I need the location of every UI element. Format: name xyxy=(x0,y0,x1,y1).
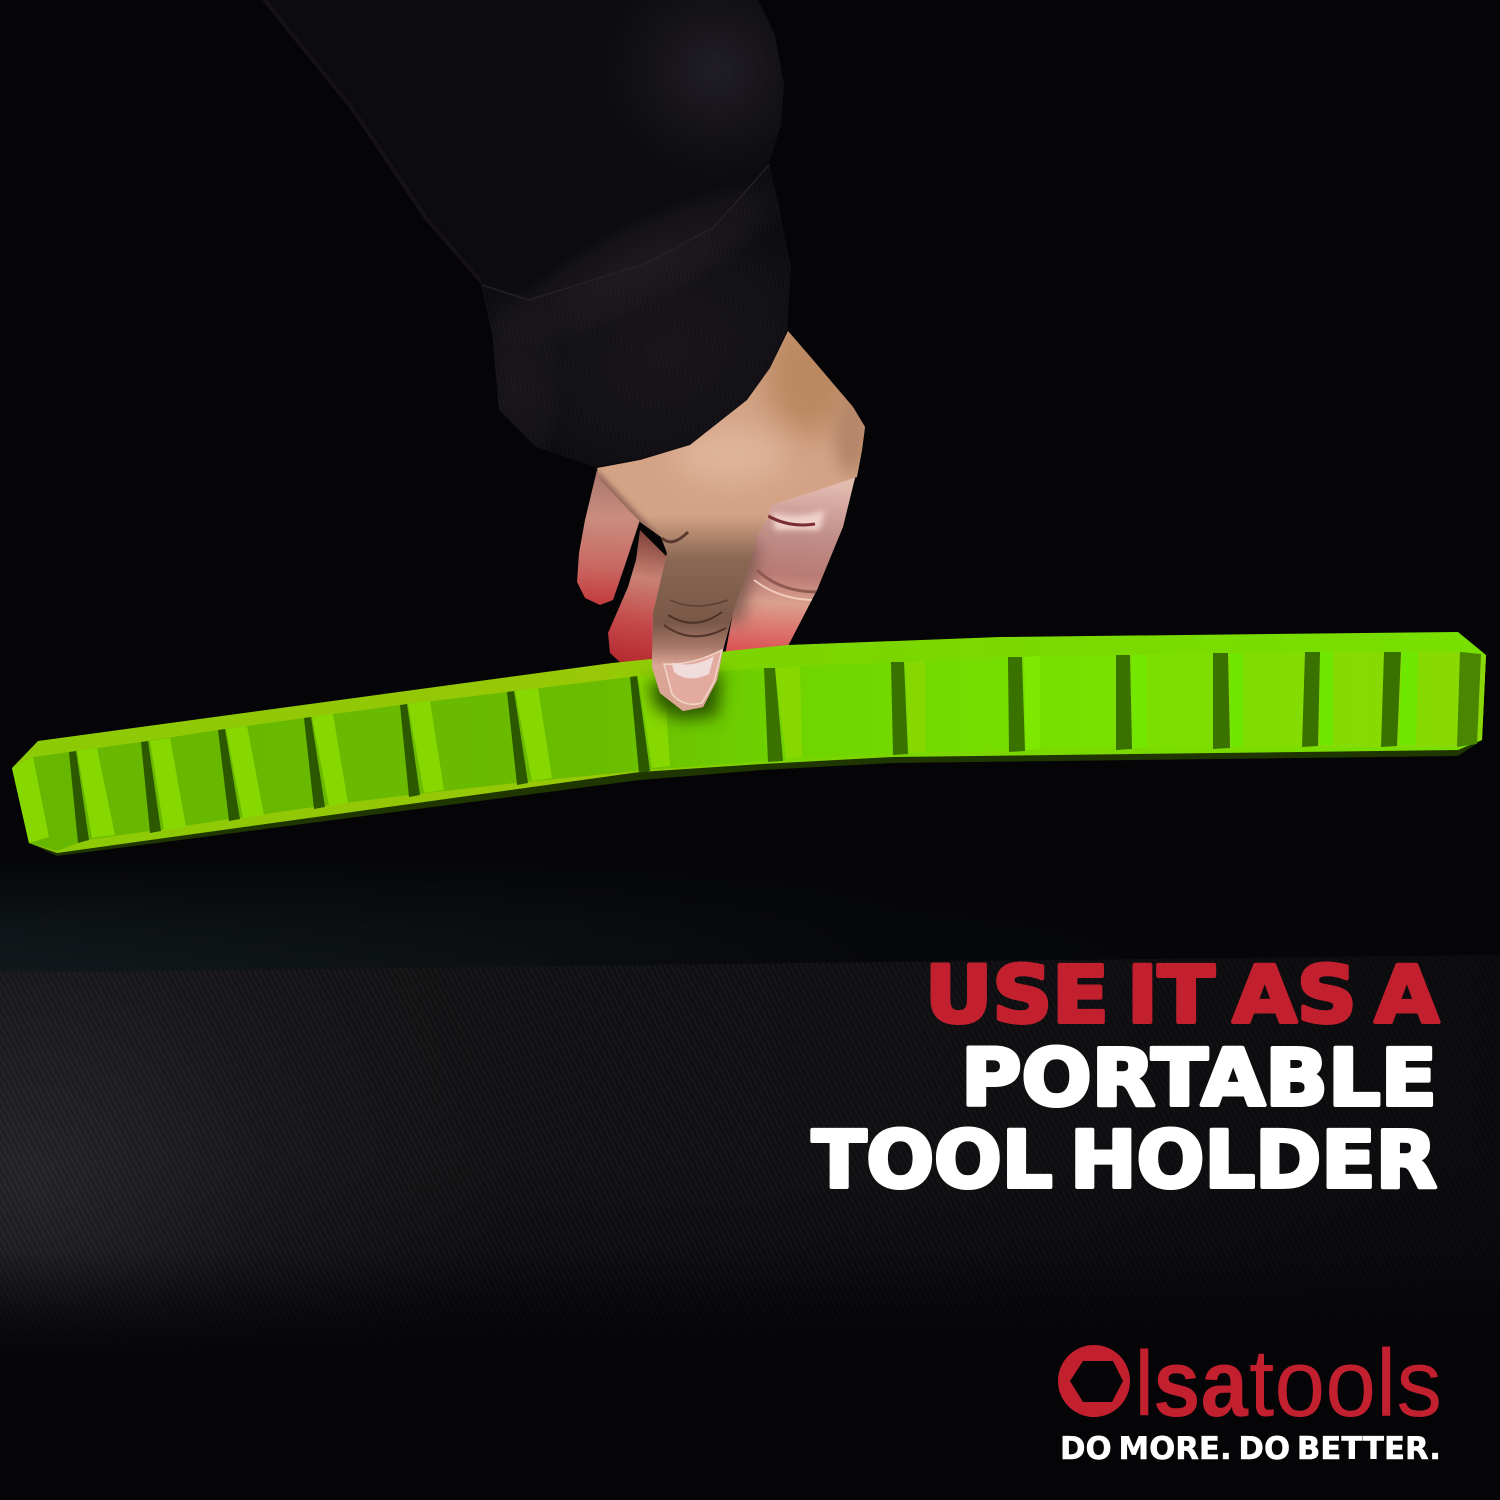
tanned wrist shading xyxy=(765,315,855,435)
bar silhouette and top surface xyxy=(12,632,1486,853)
front face xyxy=(12,652,1486,851)
logo hex-socket O xyxy=(1058,1345,1130,1417)
middle finger xyxy=(726,478,856,652)
hand: fingers behind the bar xyxy=(577,470,856,662)
sweatshirt sleeve xyxy=(262,0,791,467)
brown shaded finger xyxy=(646,520,765,711)
textured floor surface xyxy=(0,955,1500,1366)
cuff seam xyxy=(482,165,769,300)
fingernail xyxy=(664,650,722,704)
headline xyxy=(812,951,1439,1206)
hand: back of hand and index finger pressing on the bar xyxy=(597,331,865,711)
shadow cast by the finger xyxy=(648,672,722,720)
ring finger xyxy=(608,530,670,666)
headline line: use it as a: USE IT AS A xyxy=(925,951,1439,1041)
headline line: tool holder: TOOL HOLDER xyxy=(812,1116,1437,1206)
dark slots between teeth xyxy=(69,652,1481,843)
Olsatools logo xyxy=(1058,1330,1442,1467)
little finger xyxy=(577,470,640,605)
green magnetic tool holder bar xyxy=(12,632,1486,856)
headline line: portable: PORTABLE xyxy=(961,1034,1437,1124)
logo wordmark: sa: sa xyxy=(1153,1330,1249,1437)
logo wordmark: l: l xyxy=(1134,1333,1154,1435)
logo tagline: DO MORE. DO BETTER. xyxy=(1060,1431,1441,1467)
logo wordmark: tools: tools xyxy=(1249,1330,1442,1437)
bevelled highlight strips xyxy=(12,652,1418,843)
bar underside shadow xyxy=(29,740,1482,856)
